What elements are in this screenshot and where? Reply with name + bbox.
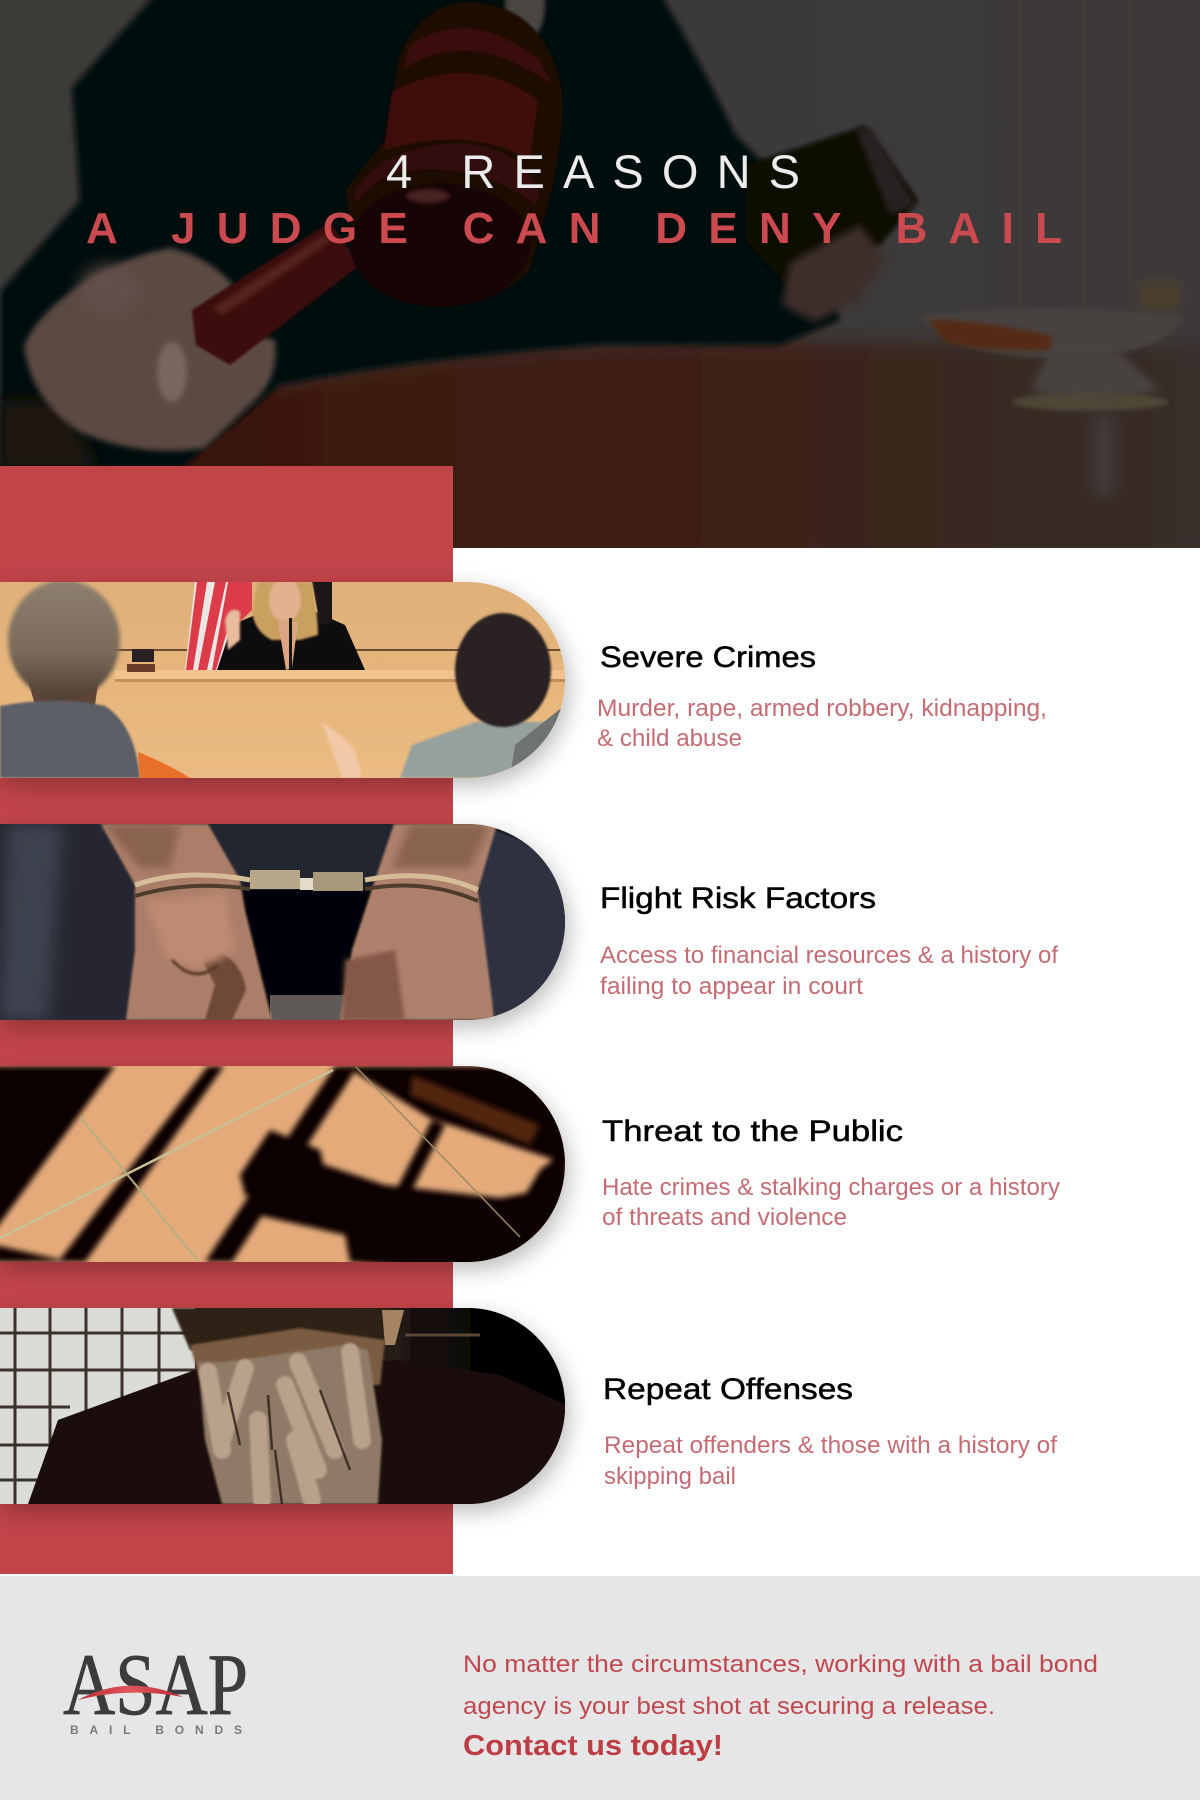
suit xyxy=(28,1360,566,1504)
item 2 text: Flight Risk Factors xyxy=(600,882,1058,1000)
title: A JUDGE CAN DENY BAIL xyxy=(86,204,1062,253)
small gavel xyxy=(132,649,154,662)
left person xyxy=(28,682,98,705)
hands xyxy=(198,1345,382,1504)
balance scales xyxy=(920,0,1183,495)
item 1 text: Severe Crimes xyxy=(597,641,1047,752)
footer call to action text: No matter the circumstances, working with a bail bond xyxy=(463,1651,1098,1678)
photo pill: man covering face xyxy=(0,1308,566,1504)
photo pill: handcuffs xyxy=(0,824,566,1020)
right person xyxy=(400,722,565,778)
title: 4 REASONS xyxy=(386,145,800,198)
logo: ASAP Bail Bonds: BAIL BONDS xyxy=(70,1723,242,1737)
item 1 text: Severe Crimes: Murder, rape, armed robbery, kidnapping, xyxy=(597,695,1047,722)
right arm and fist xyxy=(340,824,497,1020)
hand holding gavel xyxy=(24,248,276,451)
gavel handle xyxy=(192,222,360,365)
gavel head xyxy=(345,2,563,306)
item 4 text: Repeat Offenses: Repeat Offenses xyxy=(603,1373,853,1406)
judge xyxy=(217,612,365,670)
cuffs xyxy=(135,875,250,885)
item 2 text: Flight Risk Factors: failing to appear in court xyxy=(600,973,863,1000)
item 1 text: Severe Crimes: & child abuse xyxy=(597,725,742,752)
item 3 text: Threat to the Public: of threats and violence xyxy=(602,1204,847,1231)
logo: ASAP Bail Bonds: ASAP xyxy=(63,1637,248,1734)
photo pill: courtroom xyxy=(0,578,566,778)
item 4 text: Repeat Offenses: Repeat offenders & those with a history of xyxy=(604,1432,1057,1459)
item 2 text: Flight Risk Factors: Flight Risk Factors xyxy=(600,882,876,915)
hair and forehead xyxy=(172,1308,395,1350)
footer call to action text: Contact us today! xyxy=(463,1730,723,1762)
item 3 text: Threat to the Public: Threat to the Public xyxy=(602,1115,903,1148)
book and hand xyxy=(745,126,918,290)
footer call to action text: agency is your best shot at securing a release. xyxy=(463,1693,995,1720)
flag xyxy=(185,582,228,670)
panel: red background column xyxy=(0,466,453,1574)
item 2 text: Flight Risk Factors: Access to financial resources & a history of xyxy=(600,942,1058,969)
photo pill: shadow of fist on tile xyxy=(0,1066,570,1270)
judge robe xyxy=(0,0,840,470)
item 4 text: Repeat Offenses xyxy=(603,1373,1057,1490)
panel: hero photo of judge with gavel xyxy=(0,0,1200,560)
left arm and fist xyxy=(101,824,272,1020)
item 3 text: Threat to the Public xyxy=(602,1115,1060,1231)
item 3 text: Threat to the Public: Hate crimes & stalking charges or a history xyxy=(602,1174,1060,1201)
table surface xyxy=(181,334,1200,548)
footer call to action text xyxy=(463,1651,1098,1762)
item 4 text: Repeat Offenses: skipping bail xyxy=(604,1463,736,1490)
title xyxy=(86,145,1062,253)
panel: footer xyxy=(0,1576,1200,1800)
item 1 text: Severe Crimes: Severe Crimes xyxy=(600,641,816,674)
